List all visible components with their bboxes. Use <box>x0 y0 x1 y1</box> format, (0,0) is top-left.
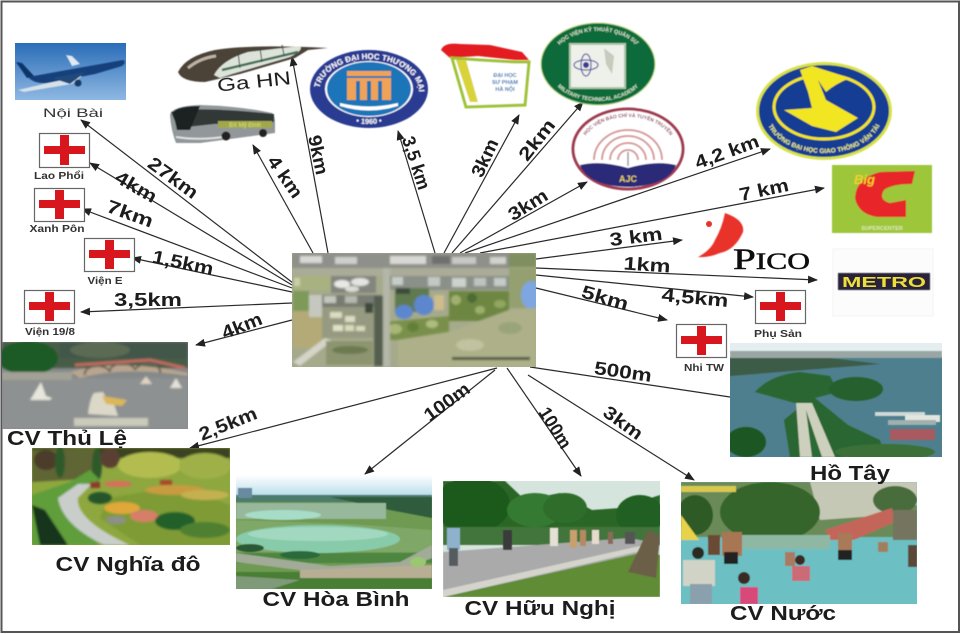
logo: Pico <box>698 213 810 276</box>
hospital: Viện 19/8: Viện 19/8 <box>25 326 75 338</box>
distance labels: 3 km <box>608 223 664 250</box>
photo: Hồ Tây <box>726 343 942 460</box>
distance labels: 100m <box>535 403 576 452</box>
hospital: Lao Phổi <box>34 134 90 182</box>
distance labels: 4 km <box>263 151 307 202</box>
distance labels: 9km <box>304 133 333 177</box>
photo: CV Nước <box>677 482 917 604</box>
distance labels: 2km <box>514 115 559 165</box>
distance labels: 3,5km <box>114 289 182 310</box>
logo: Metro: METRO <box>842 275 926 291</box>
hospital: Nhi TW <box>676 324 726 374</box>
photo: CV Hòa Bình <box>236 475 432 589</box>
label: Nội Bài: Nội Bài <box>43 106 103 120</box>
logo: Pico: P ICO <box>733 243 810 276</box>
distance labels: 5km <box>579 281 631 314</box>
hospital: Lao Phổi: Lao Phổi <box>34 170 84 182</box>
distance labels: 7km <box>104 195 156 232</box>
logo: Đại học Thương Mại: • 1960 • <box>356 118 382 125</box>
icon: coach bus: BX Mỹ Đình <box>229 123 261 129</box>
icon: coach bus <box>170 105 275 143</box>
hospital: Viện E: Viện E <box>88 275 122 287</box>
label: Hồ Tây: Hồ Tây <box>810 463 891 485</box>
logo: Đại học Sư phạm Hà Nội: SƯ PHẠM <box>492 80 518 86</box>
logo: AJC: AJC <box>619 174 637 184</box>
logo: Đại học Sư phạm Hà Nội: HÀ NỘI <box>495 85 515 93</box>
hospital: Xanh Pôn <box>30 188 84 235</box>
distance labels: 100m <box>419 378 474 425</box>
distance labels: 4km <box>218 308 265 343</box>
hospital: Nhi TW: Nhi TW <box>684 362 724 374</box>
label: CV Hòa Bình: CV Hòa Bình <box>262 589 410 611</box>
distance labels: 1,5km <box>151 246 216 279</box>
logo: Big C: Big <box>854 172 875 187</box>
distance labels: 500m <box>593 357 653 386</box>
logo: Đại học Giao thông Vận tải: TRƯỜNG ĐẠI HỌC GIAO THÔNG VẬN TẢI <box>768 122 880 154</box>
logo: Đại học Giao thông Vận tải <box>755 61 893 161</box>
label: CV Hữu Nghị: CV Hữu Nghị <box>464 598 616 620</box>
distance labels: 4,2 km <box>692 130 762 173</box>
distance labels: 3,5 km <box>398 133 435 192</box>
logo: Đại học Thương Mại <box>309 49 429 129</box>
icon: high-speed train <box>178 45 328 82</box>
photo: airplane Nội Bài <box>15 43 126 100</box>
label: Ga HN: Ga HN <box>216 68 292 96</box>
photo: CV Thủ Lệ <box>0 341 188 429</box>
logo: Big C: SUPERCENTER <box>861 226 903 232</box>
logo: Metro <box>833 249 933 316</box>
logo: Học viện Kỹ thuật Quân sự <box>540 22 656 106</box>
distance labels: 2,5km <box>196 402 260 445</box>
photo: CV Nghĩa đô <box>32 446 231 545</box>
distance labels: 27km <box>144 152 203 203</box>
logo: Đại học Sư phạm Hà Nội: ĐẠI HỌC <box>493 73 517 79</box>
distance labels <box>104 115 791 452</box>
label: CV Thủ Lệ: CV Thủ Lệ <box>7 428 127 450</box>
hospital: Viện 19/8 <box>24 290 75 338</box>
distance labels: 3km <box>467 135 503 180</box>
connector arrows <box>81 57 824 480</box>
logo: Big C <box>832 165 932 233</box>
distance labels: 3km <box>504 184 552 225</box>
site plan map (centre) <box>292 253 541 367</box>
logo: Đại học Sư phạm Hà Nội <box>441 44 529 107</box>
logo: Đại học Thương Mại: TRƯỜNG ĐẠI HỌC THƯƠNG MẠI <box>313 52 426 92</box>
distance labels: 7 km <box>737 174 791 205</box>
hospital: Viện E <box>84 238 134 287</box>
distance labels: 4km <box>112 166 161 207</box>
label: CV Nước: CV Nước <box>730 603 836 625</box>
distance labels: 1km <box>623 252 671 277</box>
distance labels: 4,5km <box>661 284 729 311</box>
logo: AJC: HỌC VIỆN BÁO CHÍ VÀ TUYÊN TRUYỀN <box>582 112 674 136</box>
logo: AJC <box>570 106 686 192</box>
label: CV Nghĩa đô: CV Nghĩa đô <box>56 554 200 576</box>
hospital: Phụ Sản <box>754 290 806 340</box>
distance labels: 3km <box>599 401 647 444</box>
hospital: Xanh Pôn: Xanh Pôn <box>30 223 84 235</box>
logo: Học viện Kỹ thuật Quân sự: MILITARY TECHNICAL ACADEMY <box>557 83 638 102</box>
hospital: Phụ Sản: Phụ Sản <box>754 328 802 340</box>
logo: Học viện Kỹ thuật Quân sự: HỌC VIỆN KỸ THUẬT QUÂN SỰ <box>556 26 640 46</box>
photo: CV Hữu Nghị <box>434 477 664 597</box>
